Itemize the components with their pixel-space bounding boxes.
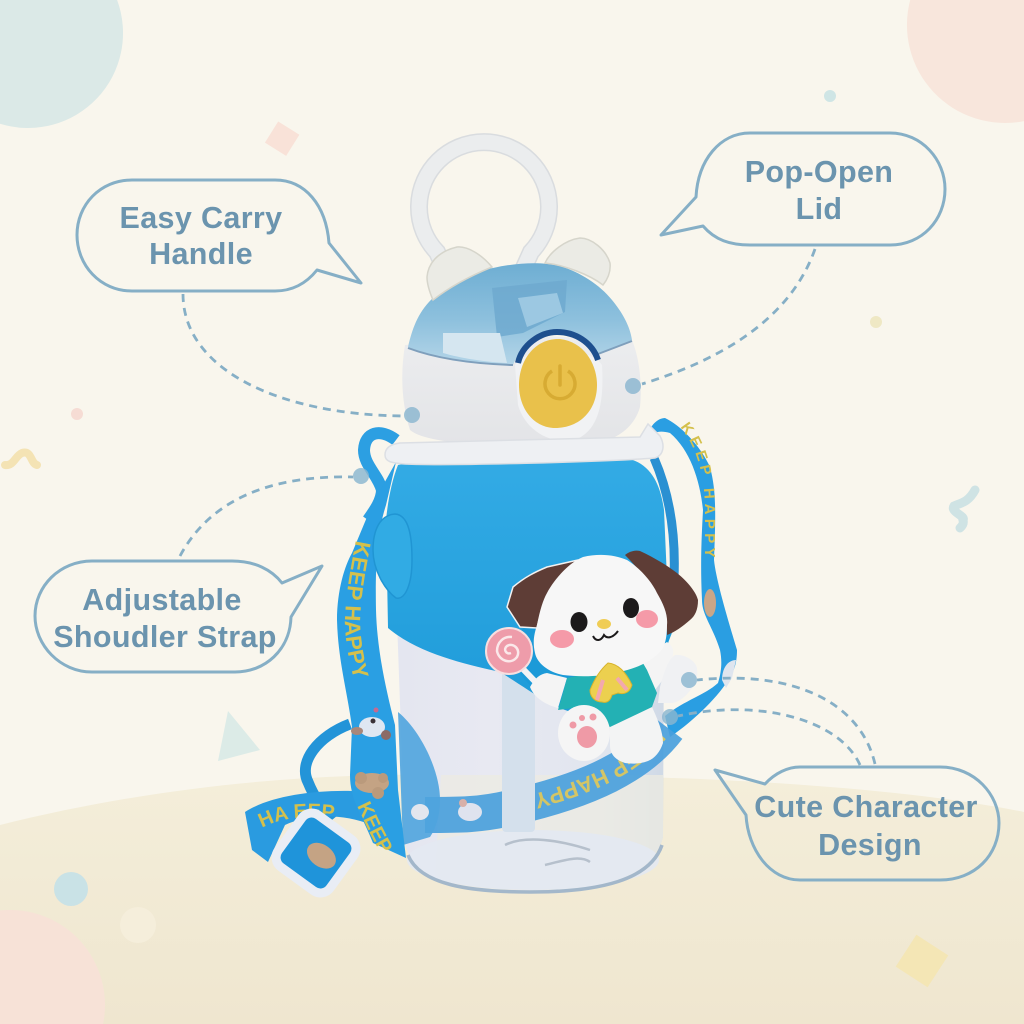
left arm [530,673,567,708]
line: strap [180,477,353,556]
strap text: end: HA EEP [258,804,334,828]
blue back plate [510,600,673,708]
floor [0,774,1024,1024]
buckle bear [302,837,341,874]
right strap [647,418,737,737]
callout: Adjustable Shoudler Strap [35,561,322,672]
right eye [623,598,639,618]
clear body [397,620,664,892]
leg [610,707,663,764]
dot: strap [353,468,369,484]
strap text: KEEP HAPPY [344,542,370,676]
lower strap end [245,791,372,862]
shirt [558,658,657,727]
label: Easy Carry [120,201,282,235]
dot: character upper [681,672,697,688]
label: Design [818,828,922,862]
dome window inner [518,293,563,327]
right ear [625,551,698,635]
dot: lid [625,378,641,394]
strap print: bear [355,772,389,799]
line: character upper [697,678,875,764]
left cheek [550,630,574,648]
fold print [411,804,429,820]
left ear [507,560,578,628]
left inner fold [398,712,440,845]
right strap text: KEEP HAPPY [680,422,715,558]
nose [597,619,611,629]
callout: Easy Carry Handle [77,180,361,291]
button surround [515,350,602,441]
dome highlight [443,333,507,363]
dome rim [408,341,632,365]
head [534,555,667,676]
handle ring [419,142,549,272]
character [486,551,698,764]
right cheek [636,610,658,628]
left ear [427,247,492,300]
dot: character lower [662,709,678,725]
straw [502,672,535,832]
base highlight [505,840,590,865]
white cap [402,335,641,445]
label: Cute Character [754,790,978,824]
bottle [398,636,682,894]
mouth [593,631,618,640]
callout: Cute Character Design [715,767,999,880]
label: Pop-Open [745,155,893,189]
base lip [408,845,662,892]
ribbon [590,663,632,702]
dot: handle [404,407,420,423]
base [407,830,659,890]
sleeve knob [373,514,412,598]
right ear [545,238,610,285]
buckle frame [271,808,361,898]
label: Handle [149,237,253,271]
small loop [305,724,350,820]
floor seen through bottle [435,775,663,892]
callout: Pop-Open Lid [661,133,945,245]
strap text lower: KEEP [358,801,392,850]
foot [558,705,610,761]
label: Shoudler Strap [53,620,277,654]
label: Lid [796,192,842,226]
strap: back sections [245,418,737,862]
line: handle [183,294,404,416]
strap print: white bird [351,708,391,740]
collar [385,424,663,465]
paw pads [570,714,597,748]
lollipop stick [522,668,549,696]
right strap bear print [704,589,716,617]
inner strap text: KEEP HAPPY [538,736,666,809]
button ring [518,332,598,363]
line: character lower [678,710,860,765]
blue sleeve [386,458,669,715]
lid [385,142,663,465]
blue dome [408,263,632,365]
long strap [337,462,406,858]
yellow button [519,339,597,428]
strap behind sleeve [654,458,674,578]
front strap [337,427,406,858]
callout lines and dots [180,249,875,765]
left eye [570,612,588,632]
strap top loop [364,433,396,520]
label: Adjustable [82,583,242,617]
right strap bird print [722,660,736,688]
dome window [492,280,567,337]
inner strap band [425,728,668,815]
power icon [545,366,575,399]
lollipop swirl [497,637,518,661]
inner strap print [458,799,482,821]
right hand [658,655,697,703]
line: lid [642,249,815,384]
buckle [271,808,361,898]
lollipop [486,628,532,674]
right arm [640,642,673,690]
